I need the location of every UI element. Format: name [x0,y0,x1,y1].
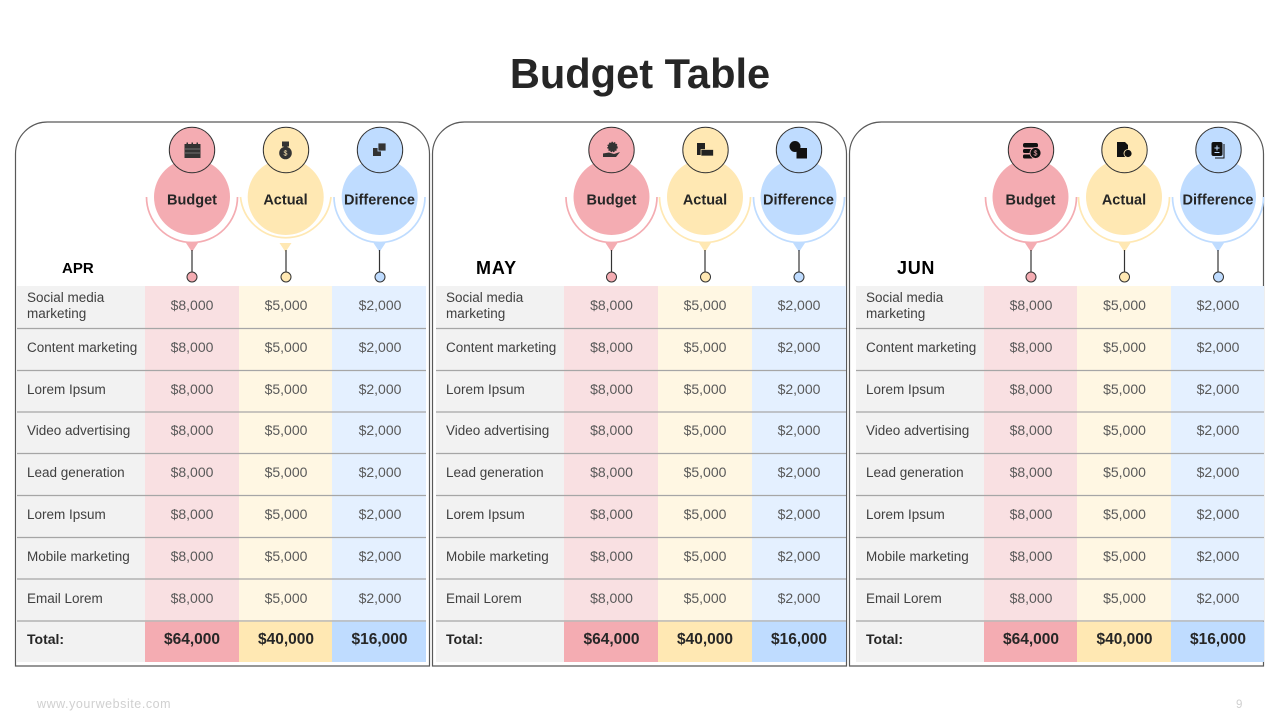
row: Total [27,622,426,662]
row: Mobile marketing: $2,000 [1197,548,1240,564]
row: Mobile marketing: $2,000 [359,548,402,564]
icon: money bag: $ [284,150,288,158]
icon: circle and square [790,141,807,158]
header: Actual [1078,127,1170,282]
month label: APR [62,260,94,277]
row: Content marketing: $5,000 [684,339,727,355]
row: Lorem Ipsum [27,381,402,397]
row: Lead generation: $5,000 [1103,464,1146,480]
row: Total: Total: [866,631,903,647]
row: Lead generation: Lead generation [27,465,125,480]
row: Lorem Ipsum: $5,000 [1103,381,1146,397]
row: Email Lorem: Email Lorem [866,591,942,606]
row: Lorem Ipsum 2 [446,506,821,522]
row: Lead generation [866,464,1240,480]
month label: JUN [897,258,935,278]
row: Email Lorem: $8,000 [171,590,214,606]
row: Lead generation: $8,000 [1010,464,1053,480]
row: Lorem Ipsum: $5,000 [265,381,308,397]
header: Difference: Difference [344,192,415,208]
header: Budget [566,127,657,282]
icon: hand with gear [603,142,620,157]
row: Video advertising: $8,000 [171,422,214,438]
row: Total: $16,000 [771,631,827,648]
row: Lorem Ipsum 2 [866,506,1240,522]
row: Social media marketing: $8,000 [1010,297,1053,313]
header: Actual: Actual [1102,192,1146,208]
row: Social media marketing: $2,000 [1197,297,1240,313]
row: Email Lorem: $2,000 [778,590,821,606]
row: Lead generation [446,464,821,480]
row: Lorem Ipsum [866,381,1240,397]
row: Mobile marketing: $5,000 [1103,548,1146,564]
title: Budget Table [510,50,770,97]
row: Mobile marketing: $5,000 [265,548,308,564]
icon: calendar [184,142,200,158]
row: Lorem Ipsum 2: $2,000 [359,506,402,522]
panel: MAY [432,122,846,666]
row: Lorem Ipsum 2: $5,000 [684,506,727,522]
row: Social media marketing: $5,000 [684,297,727,313]
row: Lorem Ipsum 2: Lorem Ipsum [866,507,945,522]
row: Content marketing: $5,000 [265,339,308,355]
row: Content marketing: $8,000 [1010,339,1053,355]
row: Lead generation: $2,000 [778,464,821,480]
row: Lorem Ipsum 2: $8,000 [1010,506,1053,522]
header: Difference [754,127,844,282]
row: Lorem Ipsum: Lorem Ipsum [27,382,106,397]
row: Mobile marketing [866,548,1240,564]
row: Mobile marketing: $8,000 [1010,548,1053,564]
row: Lorem Ipsum: $2,000 [1197,381,1240,397]
row: Email Lorem: Email Lorem [27,591,103,606]
row: Mobile marketing: $8,000 [171,548,214,564]
row: Email Lorem: $2,000 [1197,590,1240,606]
row: Video advertising: $5,000 [265,422,308,438]
row: Total: $40,000 [1096,631,1153,648]
row: Mobile marketing: Mobile marketing [866,549,969,564]
icon: bills [697,143,714,156]
row: Social media marketing: $2,000 [778,297,821,313]
row: Mobile marketing: $5,000 [684,548,727,564]
row: Total: $64,000 [164,631,220,648]
row: Social media marketing: marketing [866,306,925,321]
row: Content marketing: $2,000 [778,339,821,355]
row: Content marketing: $8,000 [590,339,633,355]
row: Mobile marketing [446,548,821,564]
header: Budget: Budget [1006,192,1056,208]
row: Content marketing: $5,000 [1103,339,1146,355]
row: Video advertising: $5,000 [684,422,727,438]
header: Actual [240,127,331,282]
row: Lead generation [27,464,402,480]
row: Total: $16,000 [1190,631,1246,648]
row: Lead generation: Lead generation [866,465,964,480]
row: Lead generation: $5,000 [684,464,727,480]
header: Budget: Budget [167,192,217,208]
row: Total: Total: [446,631,483,647]
header: Difference: Difference [1183,192,1253,208]
row: Mobile marketing: Mobile marketing [446,549,549,564]
row: Social media marketing: Social media [27,290,105,305]
row: Social media marketing [27,290,402,321]
row: Total: $40,000 [677,631,733,648]
row: Email Lorem: $5,000 [265,590,308,606]
header: Difference: Difference [763,192,834,208]
row: Video advertising: $8,000 [590,422,633,438]
row: Social media marketing: Social media [866,290,944,305]
row: Social media marketing: $5,000 [265,297,308,313]
row: Video advertising: $2,000 [1197,422,1240,438]
row: Lorem Ipsum 2: $8,000 [590,506,633,522]
row: Video advertising: $2,000 [359,422,402,438]
row: Social media marketing: $5,000 [1103,297,1146,313]
row: Lorem Ipsum 2: $2,000 [778,506,821,522]
row: Lorem Ipsum [446,381,821,397]
row: Email Lorem: $8,000 [1010,590,1053,606]
row: Lead generation: $2,000 [359,464,402,480]
row: Social media marketing: Social media [446,290,524,305]
row: Lorem Ipsum 2: $5,000 [1103,506,1146,522]
row: Lorem Ipsum 2 [27,506,402,522]
row: Lorem Ipsum 2: $8,000 [171,506,214,522]
row: Total [866,622,1264,662]
row: Email Lorem: $5,000 [684,590,727,606]
row: Video advertising [446,422,821,438]
row: Content marketing: $2,000 [1197,339,1240,355]
row: Video advertising: Video advertising [27,423,130,438]
row: Content marketing: Content marketing [27,340,137,355]
row: Lead generation: $2,000 [1197,464,1240,480]
header: Difference [1172,127,1264,282]
row: Lead generation: $8,000 [590,464,633,480]
row: Social media marketing: $8,000 [590,297,633,313]
row: Lorem Ipsum: Lorem Ipsum [446,382,525,397]
row: Total: $64,000 [1003,631,1059,648]
row: Content marketing [27,339,402,355]
header: Budget [146,127,238,282]
icon: coins database [1023,143,1041,158]
row: Video advertising: Video advertising [446,423,549,438]
row: Total: $16,000 [351,631,408,648]
row: Lorem Ipsum 2: $5,000 [265,506,308,522]
row: Lead generation: $8,000 [171,464,214,480]
row: Total: $40,000 [258,631,314,648]
row: Video advertising: $8,000 [1010,422,1053,438]
row: Email Lorem: $5,000 [1103,590,1146,606]
header: Budget: Budget [587,192,637,208]
row: Video advertising [27,422,402,438]
row: Lorem Ipsum: $8,000 [1010,381,1053,397]
icon: overlapping squares [373,143,386,156]
row: Mobile marketing [27,548,402,564]
panel: APR [16,122,430,666]
row: Content marketing: $8,000 [171,339,214,355]
row: Video advertising: Video advertising [866,423,969,438]
icon: coins database: $ [1034,150,1038,158]
row: Total [446,622,846,662]
row: Content marketing [866,339,1240,355]
row: Social media marketing: $2,000 [359,297,402,313]
row: Email Lorem: Email Lorem [446,591,522,606]
row: Social media marketing: marketing [27,306,86,321]
row: Lead generation: $5,000 [265,464,308,480]
row: Email Lorem [446,590,821,606]
row: Video advertising: $2,000 [778,422,821,438]
row: Lead generation: Lead generation [446,465,544,480]
month label: MAY [476,258,517,278]
row: Email Lorem [27,590,402,606]
page number: 9 [1236,699,1242,711]
header: Actual: Actual [683,192,727,208]
row: Lorem Ipsum 2: Lorem Ipsum [27,507,106,522]
row: Mobile marketing: Mobile marketing [27,549,130,564]
row: Lorem Ipsum: $5,000 [684,381,727,397]
icon: money bag [279,142,292,159]
row: Content marketing: Content marketing [866,340,976,355]
row: Content marketing [446,339,821,355]
row: Email Lorem [866,590,1240,606]
row: Social media marketing [866,290,1240,321]
row: Lorem Ipsum: $2,000 [778,381,821,397]
row: Lorem Ipsum: Lorem Ipsum [866,382,945,397]
row: Lorem Ipsum 2: Lorem Ipsum [446,507,525,522]
row: Social media marketing: marketing [446,306,505,321]
row: Content marketing: Content marketing [446,340,556,355]
panel: JUN [850,122,1264,666]
row: Total: Total: [27,631,64,647]
row: Social media marketing [446,290,821,321]
row: Content marketing: $2,000 [359,339,402,355]
row: Lorem Ipsum 2: $2,000 [1197,506,1240,522]
header: Actual [660,127,750,282]
icon: document with coin [1117,142,1132,158]
row: Video advertising [866,422,1240,438]
icon: plus minus document [1212,142,1224,158]
row: Total: $64,000 [583,631,640,648]
header: Budget [986,127,1076,282]
footer website: www.yourwebsite.com [36,697,171,711]
row: Email Lorem: $2,000 [359,590,402,606]
row: Video advertising: $5,000 [1103,422,1146,438]
row: Lorem Ipsum: $8,000 [590,381,633,397]
row: Mobile marketing: $2,000 [778,548,821,564]
row: Social media marketing: $8,000 [171,297,214,313]
header: Actual: Actual [263,192,308,208]
row: Lorem Ipsum: $2,000 [359,381,402,397]
row: Email Lorem: $8,000 [590,590,633,606]
row: Lorem Ipsum: $8,000 [171,381,214,397]
header: Difference [334,127,425,282]
row: Mobile marketing: $8,000 [590,548,633,564]
